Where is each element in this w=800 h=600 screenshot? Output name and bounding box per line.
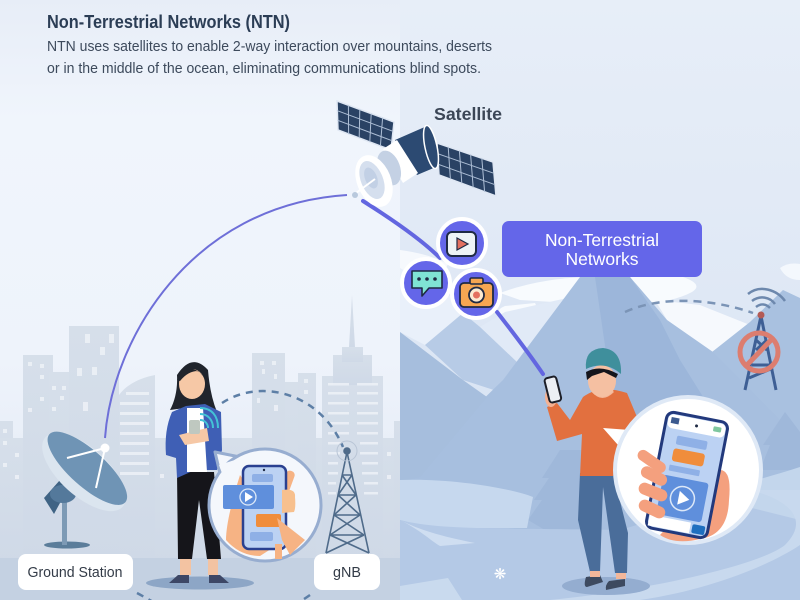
right solar panel <box>437 143 496 196</box>
thick link: satellite to icons <box>363 201 440 258</box>
dashed link: to blocked tower <box>625 301 753 313</box>
blue message <box>250 532 273 541</box>
man hoodie <box>547 389 637 476</box>
woman jacket <box>166 404 222 478</box>
woman phone <box>189 420 200 434</box>
background: left city panel <box>0 0 401 600</box>
dish base <box>44 542 90 548</box>
icon: blocked cell tower <box>740 289 785 390</box>
man speech bubble <box>603 397 761 543</box>
background: right mountain panel <box>400 0 800 600</box>
icon: chat bubble <box>402 259 450 307</box>
city skyline <box>0 295 401 563</box>
man legs <box>578 473 628 573</box>
dish mount <box>44 480 67 514</box>
gNB tower <box>326 441 369 553</box>
thick link: icons to user phone <box>497 312 543 374</box>
satellite <box>337 101 496 212</box>
video card <box>223 485 274 509</box>
phone screen <box>645 411 729 539</box>
description text: NTN uses satellites to enable 2-way interaction over mountains, deserts <box>47 39 492 55</box>
woman head <box>179 369 205 399</box>
hand behind phone <box>660 470 730 541</box>
Ground Station label <box>18 554 133 590</box>
phone <box>243 466 286 549</box>
woman shoes <box>169 575 229 583</box>
fingers <box>282 490 295 513</box>
man shoes <box>585 575 625 590</box>
description text: or in the middle of the ocean, eliminating communications blind spots. <box>47 61 481 77</box>
man shadow <box>562 577 650 595</box>
wifi arcs <box>200 408 218 428</box>
woman legs <box>177 472 221 559</box>
hands <box>226 475 285 556</box>
panel: Non-Terrestrial Networks label: Networks <box>566 249 639 269</box>
snowflake: ❋ <box>494 566 506 583</box>
gNB label: gNB <box>333 564 361 581</box>
orange message <box>256 514 281 527</box>
woman shadow <box>146 576 254 590</box>
icon: camera <box>452 270 500 318</box>
gNB label <box>314 554 380 590</box>
dish reflector <box>29 419 139 525</box>
woman speech bubble <box>209 449 321 561</box>
pine trees <box>528 412 800 540</box>
panel: Non-Terrestrial Networks label: Non-Terrestrial <box>545 230 659 250</box>
snowy foreground <box>400 467 800 600</box>
satellite body <box>373 124 441 189</box>
panel: Non-Terrestrial Networks label <box>502 221 702 277</box>
title: Non-Terrestrial Networks (NTN) <box>47 12 290 32</box>
left solar panel <box>337 101 394 150</box>
mountain range <box>400 250 800 530</box>
woman hands <box>179 428 209 445</box>
ground station dish <box>29 419 139 548</box>
woman with phone <box>146 362 254 590</box>
Ground Station label: Ground Station <box>28 564 122 581</box>
man with phone <box>544 348 761 595</box>
man hand and phone <box>545 387 557 407</box>
woman hair <box>170 362 217 412</box>
dish feed arms <box>67 448 105 488</box>
fingers <box>635 448 669 520</box>
woman shirt <box>187 408 207 472</box>
ground: city street <box>0 558 401 600</box>
satellite dish <box>348 150 400 212</box>
description text <box>47 39 492 77</box>
thin uplink arc: ground station to satellite <box>105 195 347 438</box>
man hat <box>586 348 621 374</box>
dashed link: lower arc <box>137 593 310 600</box>
dashed link: person to gNB <box>222 391 343 447</box>
satellite label: Satellite <box>434 104 502 124</box>
icon: video play <box>438 219 486 267</box>
man head <box>588 365 616 397</box>
